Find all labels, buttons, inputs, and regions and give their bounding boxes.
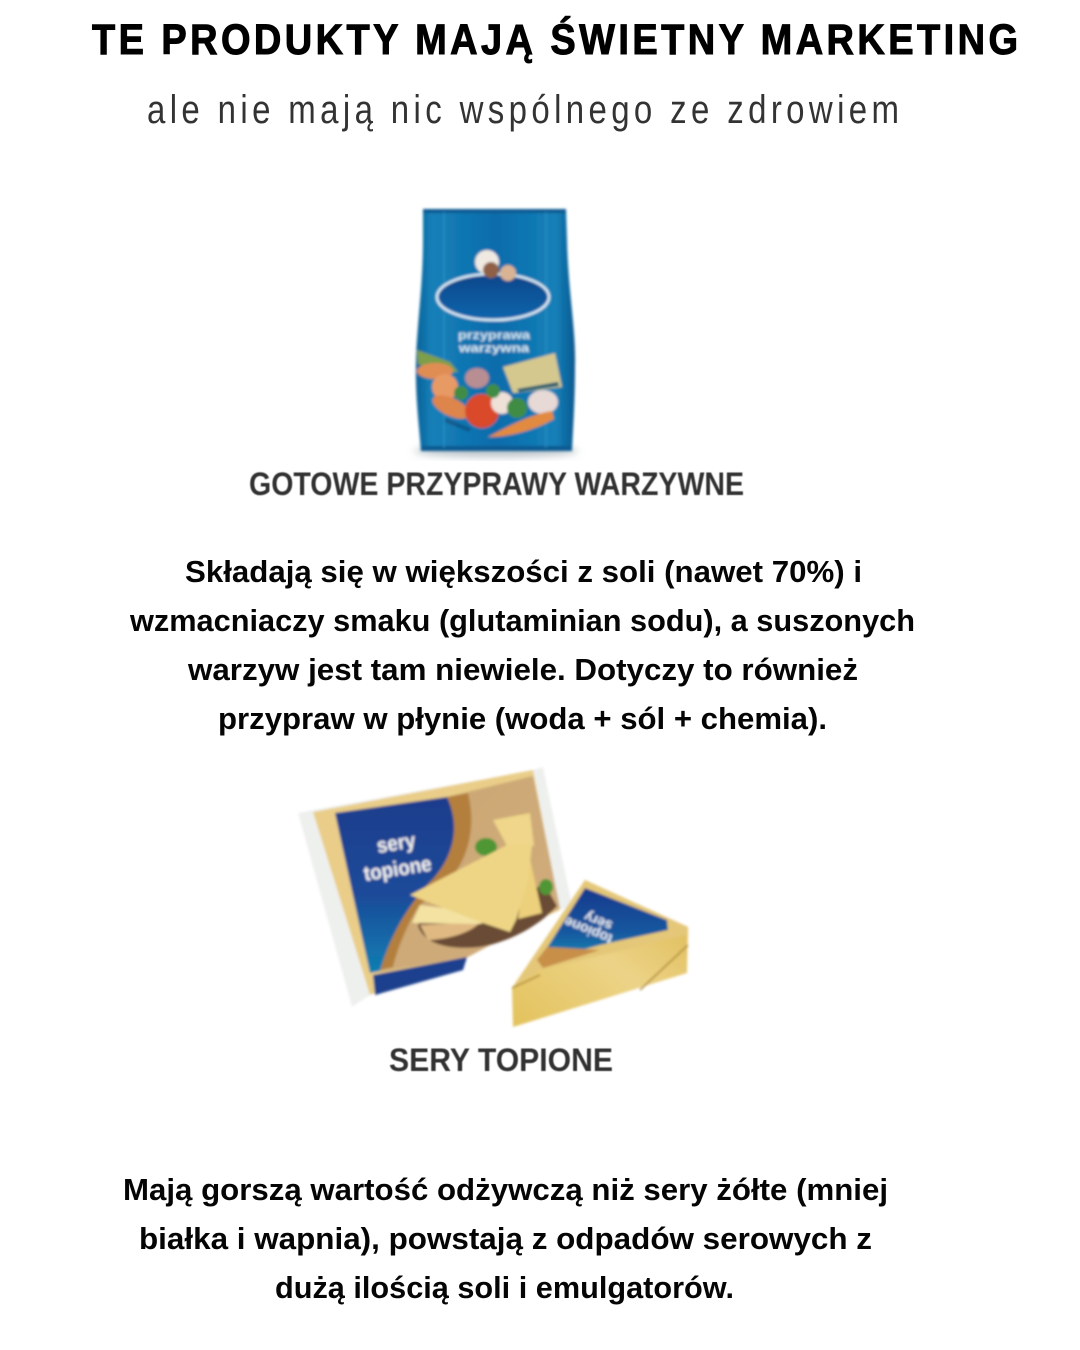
product image: seasoning bag: warzywna <box>458 341 529 355</box>
text block: seasoning description: przypraw w płynie (woda + sól + chemia). <box>218 701 827 736</box>
cheese wedge: sery <box>582 909 614 934</box>
subtitle: ale nie mają nic wspólnego ze zdrowiem <box>147 87 899 132</box>
text block: seasoning description <box>129 554 915 736</box>
cheese wedge <box>512 880 688 1027</box>
title: TE PRODUKTY MAJĄ ŚWIETNY MARKETING <box>92 15 1018 63</box>
text block: cheese description: białka i wapnia), powstają z odpadów serowych z <box>139 1221 872 1256</box>
cheese pack: topione <box>362 853 433 886</box>
cheese pack <box>298 767 572 1007</box>
product image: processed cheese <box>298 767 688 1027</box>
product label: cheese: SERY TOPIONE <box>389 1042 613 1078</box>
product label: seasoning: GOTOWE PRZYPRAWY WARZYWNE <box>249 466 744 502</box>
text block: seasoning description: warzyw jest tam niewiele. Dotyczy to również <box>187 652 858 687</box>
cheese wedge: topione <box>562 914 615 948</box>
text block: seasoning description: Składają się w większości z soli (nawet 70%) i <box>185 554 862 589</box>
text block: seasoning description: wzmacniaczy smaku (glutaminian sodu), a suszonych <box>129 603 915 638</box>
product image: seasoning bag <box>414 209 578 457</box>
text block: cheese description: Mają gorszą wartość odżywczą niż sery żółte (mniej <box>123 1172 888 1207</box>
text block: cheese description: dużą ilością soli i emulgatorów. <box>275 1270 734 1305</box>
cheese pack: sery <box>375 829 417 858</box>
text block: cheese description <box>123 1172 888 1305</box>
product image: seasoning bag: przyprawa <box>458 328 530 342</box>
